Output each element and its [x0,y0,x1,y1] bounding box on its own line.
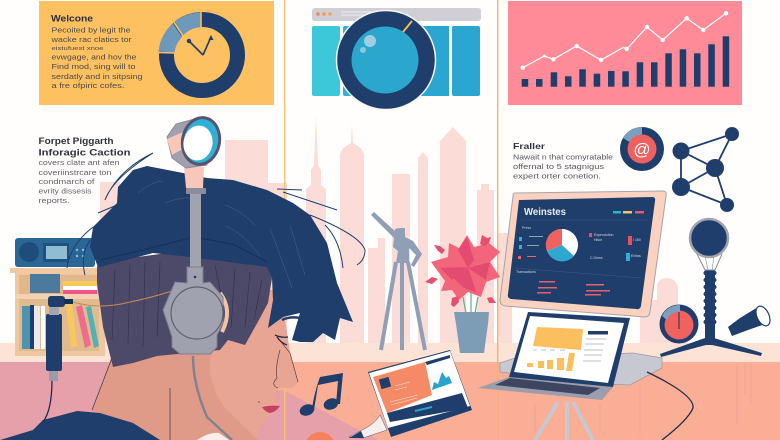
radio on shelf [15,238,95,267]
text block: forpet piggarth: reports. [38,196,70,205]
trend line [520,11,728,70]
eye [275,335,288,345]
icon: network graph [672,127,739,212]
monitor dashboard [500,191,666,317]
icon: at-sign donut [620,127,664,171]
eyebrow [282,317,300,320]
lamp head [167,113,225,267]
undercut hair [97,250,272,367]
top hair [90,166,353,342]
text block: forpet piggarth: Inforagic Caction [38,148,131,158]
floor [0,362,780,440]
dashboard title: Weinstes [524,207,566,218]
right microphone stand [660,219,762,357]
laptop chart panel [533,327,583,350]
heading: welcome: Welcone [51,14,93,24]
dashboard labels: Press [522,226,531,230]
dashboard markers [518,233,632,261]
dashboard labels [516,226,641,274]
loose strands [67,153,365,275]
wall base strip [0,343,780,363]
camera tripod [371,212,425,350]
text block: forpet piggarth [38,136,131,205]
icon: music notes [298,373,343,418]
skin [92,290,298,440]
hair band line [100,238,267,262]
left microphone [43,291,172,422]
welcome body text: Pecoited by legit the [52,26,130,34]
laptop [478,312,630,400]
device box under laptop [500,353,662,385]
text block: fraller: expert orter conetion. [513,172,601,180]
welcome body text [50,26,143,90]
dashboard labels: I 180 [633,238,641,242]
dashboard red bars [537,281,610,296]
text block: forpet piggarth: Forpet Piggarth [38,136,114,147]
dashboard labels: C Dhins [590,256,603,260]
text block: forpet piggarth: condmarch of [38,177,95,186]
dashboard labels: Hitue [594,238,602,242]
panel: welcome [39,1,274,105]
nose and face lines [258,338,298,402]
headphones [163,113,232,440]
spotlight icon [728,304,773,336]
icon: at-sign donut: @ [633,140,651,159]
welcome body text: wacke rac clatics tor [50,35,132,44]
orange circle [305,432,335,440]
icon: lens [336,10,436,110]
dashboard labels: Expendution [594,233,614,237]
ear cup [163,267,227,354]
person [0,153,365,440]
text block: fraller [513,141,613,180]
lips [262,406,280,413]
dashboard labels: Transactions [516,270,536,274]
city skyline background [100,115,678,347]
text block: fraller: Nawait n that comyratable [513,152,613,162]
text block: forpet piggarth: evrity dissesis [38,186,92,196]
text block: forpet piggarth: coveriinstrcare ton [38,168,112,177]
text block: forpet piggarth: covers clate ant afen [38,158,120,167]
donut clock chart [158,12,238,90]
bookshelf [10,268,105,356]
pie chart [546,229,578,261]
text block: fraller: offernal to 5 stagnigus [513,162,605,171]
welcome body text: serdatly and in sitpsing [52,72,142,81]
cable [193,356,232,440]
panel: browser window with lens [312,8,481,110]
welcome body text: a fre ofpiric cofes. [52,81,124,90]
gauge icon [660,304,698,344]
vertical divider left [284,0,285,440]
tablet with pen [349,350,472,438]
welcome body text: evwgage, and hov the [52,52,136,62]
dashboard labels: Ehifas [631,254,641,258]
collar [197,433,229,440]
legend chips [613,211,644,214]
cable [647,372,693,440]
flower in pot [425,235,500,353]
welcome body text: Find mod, sing will to [52,62,136,71]
text block: fraller: Fraller [513,141,546,151]
panel: bar and line chart [508,1,742,105]
shirt [0,411,160,440]
vertical divider right [497,0,498,440]
tripod below laptop [535,402,593,440]
welcome body text: eistufuest xnoe [52,46,104,52]
bars [522,36,729,87]
